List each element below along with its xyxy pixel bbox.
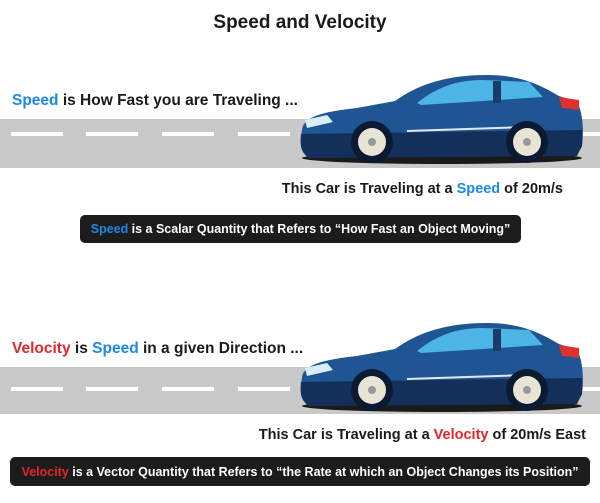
road 1: [0, 119, 600, 168]
title: Speed and Velocity: [213, 12, 387, 33]
velocity statement: This Car is Traveling at a Velocity of 20m/s East: [259, 427, 586, 443]
callout: velocity definition: Velocity is a Vector Quantity that Refers to “the Rate at which an Object Changes its Position”: [22, 464, 578, 479]
heading: velocity: Velocity is Speed in a given Direction ...: [12, 340, 303, 357]
car 2: [300, 323, 583, 412]
road 2: [0, 367, 600, 414]
speed statement: This Car is Traveling at a Speed of 20m/s: [282, 181, 563, 197]
car 1: [300, 75, 583, 164]
heading: speed: Speed is How Fast you are Traveling ...: [12, 92, 298, 109]
callout: velocity definition: [10, 457, 590, 486]
callout: speed definition: Speed is a Scalar Quantity that Refers to “How Fast an Object Moving”: [91, 221, 510, 236]
callout: speed definition: [80, 215, 521, 243]
